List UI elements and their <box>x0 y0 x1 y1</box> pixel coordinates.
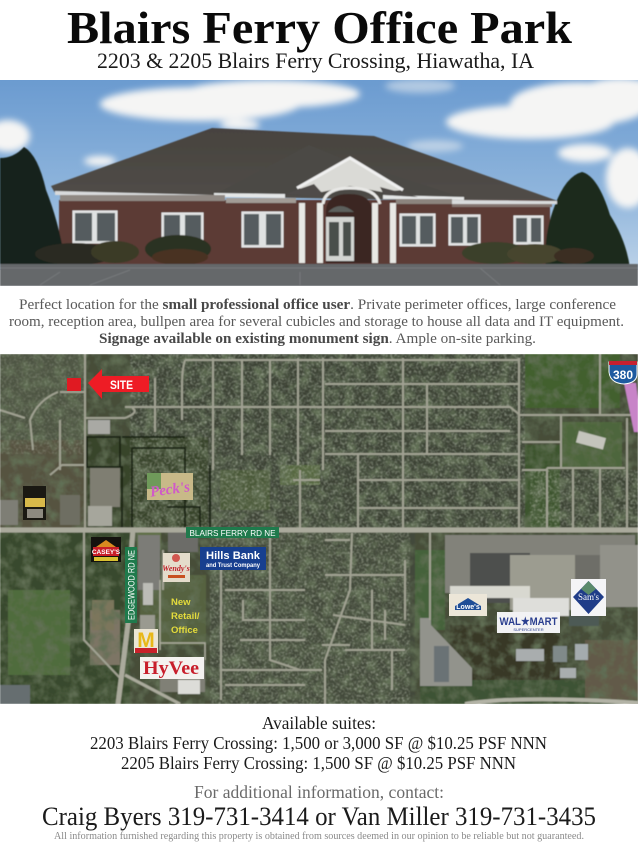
I-380 shield: 380 <box>613 368 633 382</box>
tree right <box>545 172 630 268</box>
lower residential <box>221 533 322 700</box>
logo: McDonald's <box>134 629 158 653</box>
logo: Hills Bank <box>200 547 266 570</box>
street sign: Edgewood Rd NE: EDGEWOOD RD NE <box>126 550 136 620</box>
new retail office label <box>171 597 200 636</box>
main roof <box>51 128 558 201</box>
logo: Casey's: CASEY'S <box>92 549 121 556</box>
site marker <box>67 378 81 391</box>
brick wall <box>59 200 550 265</box>
suite 2203: 2203 Blairs Ferry Crossing: 1,500 or 3,000 SF @ $10.25 PSF NNN <box>90 733 547 753</box>
subtitle: address: 2203 & 2205 Blairs Ferry Crossing, Hiawatha, IA <box>97 48 534 73</box>
streets <box>0 354 632 704</box>
upper residential horizontals <box>125 360 632 508</box>
new retail office label: New <box>171 597 191 608</box>
logo: Hy-Vee: HyVee <box>143 658 199 679</box>
logo: Wendy's: Wendy's <box>162 564 190 573</box>
logo: Lowe's <box>449 594 487 616</box>
logo: Sam's Club: Sam's <box>578 592 600 602</box>
logo: Wendy's <box>162 553 190 582</box>
shrubs <box>35 242 104 264</box>
pavement <box>0 264 638 286</box>
title: Blairs Ferry Office Park <box>67 2 572 53</box>
main roads <box>0 530 638 704</box>
suite 2205: 2205 Blairs Ferry Crossing: 1,500 SF @ $10.25 PSF NNN <box>121 753 516 773</box>
texture <box>0 354 638 704</box>
building <box>0 128 638 286</box>
entry arch <box>326 194 372 263</box>
aerial map <box>0 354 638 704</box>
clouds <box>0 78 638 208</box>
logo: Hills Bank: and Trust Company <box>206 563 261 569</box>
description paragraph <box>9 297 624 347</box>
suites heading: Available suites: <box>262 713 376 733</box>
description line 1: Perfect location for the small professional office user. Private perimeter offices, large conference <box>19 297 616 313</box>
porch roofs <box>300 184 322 192</box>
logo: McDonald's: M <box>137 629 155 652</box>
map base <box>0 354 638 704</box>
logo: Walmart <box>497 612 560 633</box>
terrain patches <box>0 354 638 704</box>
I-380 shield <box>609 361 637 384</box>
contact prompt: For additional information, contact: <box>194 782 444 802</box>
new retail office label: Office <box>171 625 198 636</box>
description line 3: Signage available on existing monument sign. Ample on-site parking. <box>99 331 536 347</box>
logo: Hills Bank: Hills Bank <box>206 550 261 562</box>
street sign: Blairs Ferry Rd NE: BLAIRS FERRY RD NE <box>190 529 276 538</box>
interstate <box>624 383 638 432</box>
logo: upper left store <box>23 486 46 520</box>
new retail office label: Retail/ <box>171 611 200 622</box>
eaves <box>54 190 210 196</box>
front gable roof <box>216 145 464 198</box>
site arrow: SITE <box>110 380 133 392</box>
Peck's sign: Peck's <box>149 479 191 501</box>
windows <box>73 211 543 247</box>
available suites <box>90 713 547 773</box>
logo: Walmart: WAL★MART <box>500 616 558 628</box>
site arrow <box>88 369 149 399</box>
photo: office building <box>0 78 638 286</box>
tree left <box>0 147 66 268</box>
disclaimer: All information furnished regarding this property is obtained from sources deemed in our opinion to be reliable but not guaranteed. <box>54 831 584 842</box>
columns <box>299 203 396 263</box>
hedge outlines <box>87 437 210 530</box>
commercial lots <box>0 420 638 704</box>
logo: Sam's Club <box>571 579 606 616</box>
description line 2: room, reception area, bullpen area for several cubicles and storage to house all data and IT equipment. <box>9 314 624 330</box>
pediment <box>297 158 403 192</box>
door <box>326 217 354 261</box>
sky <box>0 80 638 270</box>
contact names and phones: Craig Byers 319-731-3414 or Van Miller 319-731-3435 <box>42 802 596 831</box>
logo: Casey's <box>91 537 121 562</box>
logo: Lowe's: Lowe's <box>456 604 480 611</box>
contact block <box>42 782 596 842</box>
logo: Walmart: SUPERCENTER <box>513 627 544 632</box>
